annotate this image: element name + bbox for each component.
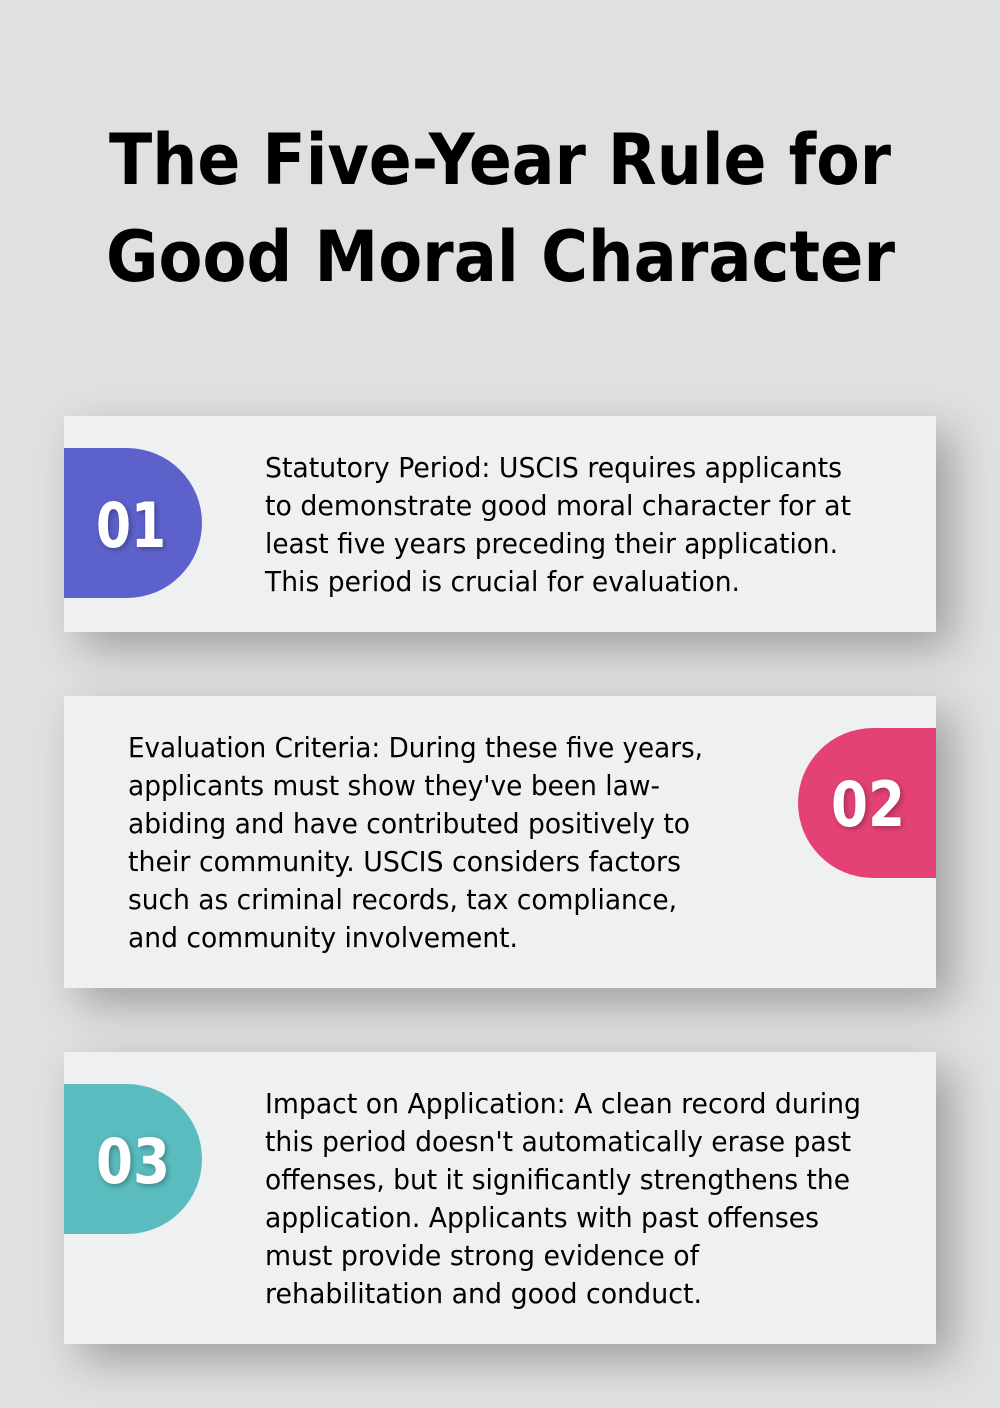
text block 2: abiding and have contributed positively to [128, 807, 690, 840]
text block 2: applicants must show they've been law- [128, 769, 660, 802]
number 01: 01 [96, 489, 166, 562]
title: The Five-Year Rule for [109, 119, 891, 201]
number 03: 03 [96, 1125, 170, 1198]
title: Good Moral Character [106, 216, 895, 298]
text block 1: This period is crucial for evaluation. [264, 565, 740, 598]
text block 1: Statutory Period: USCIS requires applicants [265, 451, 842, 484]
panel: card 3 impact on application [64, 1052, 936, 1344]
number 02: 02 [831, 768, 905, 841]
text block 2: and community involvement. [128, 921, 518, 954]
text block 3: must provide strong evidence of [265, 1239, 700, 1272]
panel: card 1 statutory period [64, 416, 936, 632]
text block 1: to demonstrate good moral character for at [265, 489, 851, 522]
badge 03 [64, 1084, 202, 1234]
text block 3 [265, 1087, 861, 1310]
text block 3: Impact on Application: A clean record during [265, 1087, 861, 1120]
text block 1: least five years preceding their application. [265, 527, 838, 560]
text block 2 [128, 731, 703, 954]
text block 2: their community. USCIS considers factors [128, 845, 681, 878]
text block 1 [264, 451, 851, 598]
text block 3: this period doesn't automatically erase past [265, 1125, 851, 1158]
text block 3: rehabilitation and good conduct. [265, 1277, 702, 1310]
panel: card 2 evaluation criteria [64, 696, 936, 988]
badge 01 [64, 448, 202, 598]
title [106, 119, 895, 298]
badge 02 [798, 728, 936, 878]
text block 3: offenses, but it significantly strengthens the [265, 1163, 850, 1196]
text block 2: such as criminal records, tax compliance, [128, 883, 677, 916]
text block 3: application. Applicants with past offenses [265, 1201, 819, 1234]
text block 2: Evaluation Criteria: During these five years, [128, 731, 703, 764]
